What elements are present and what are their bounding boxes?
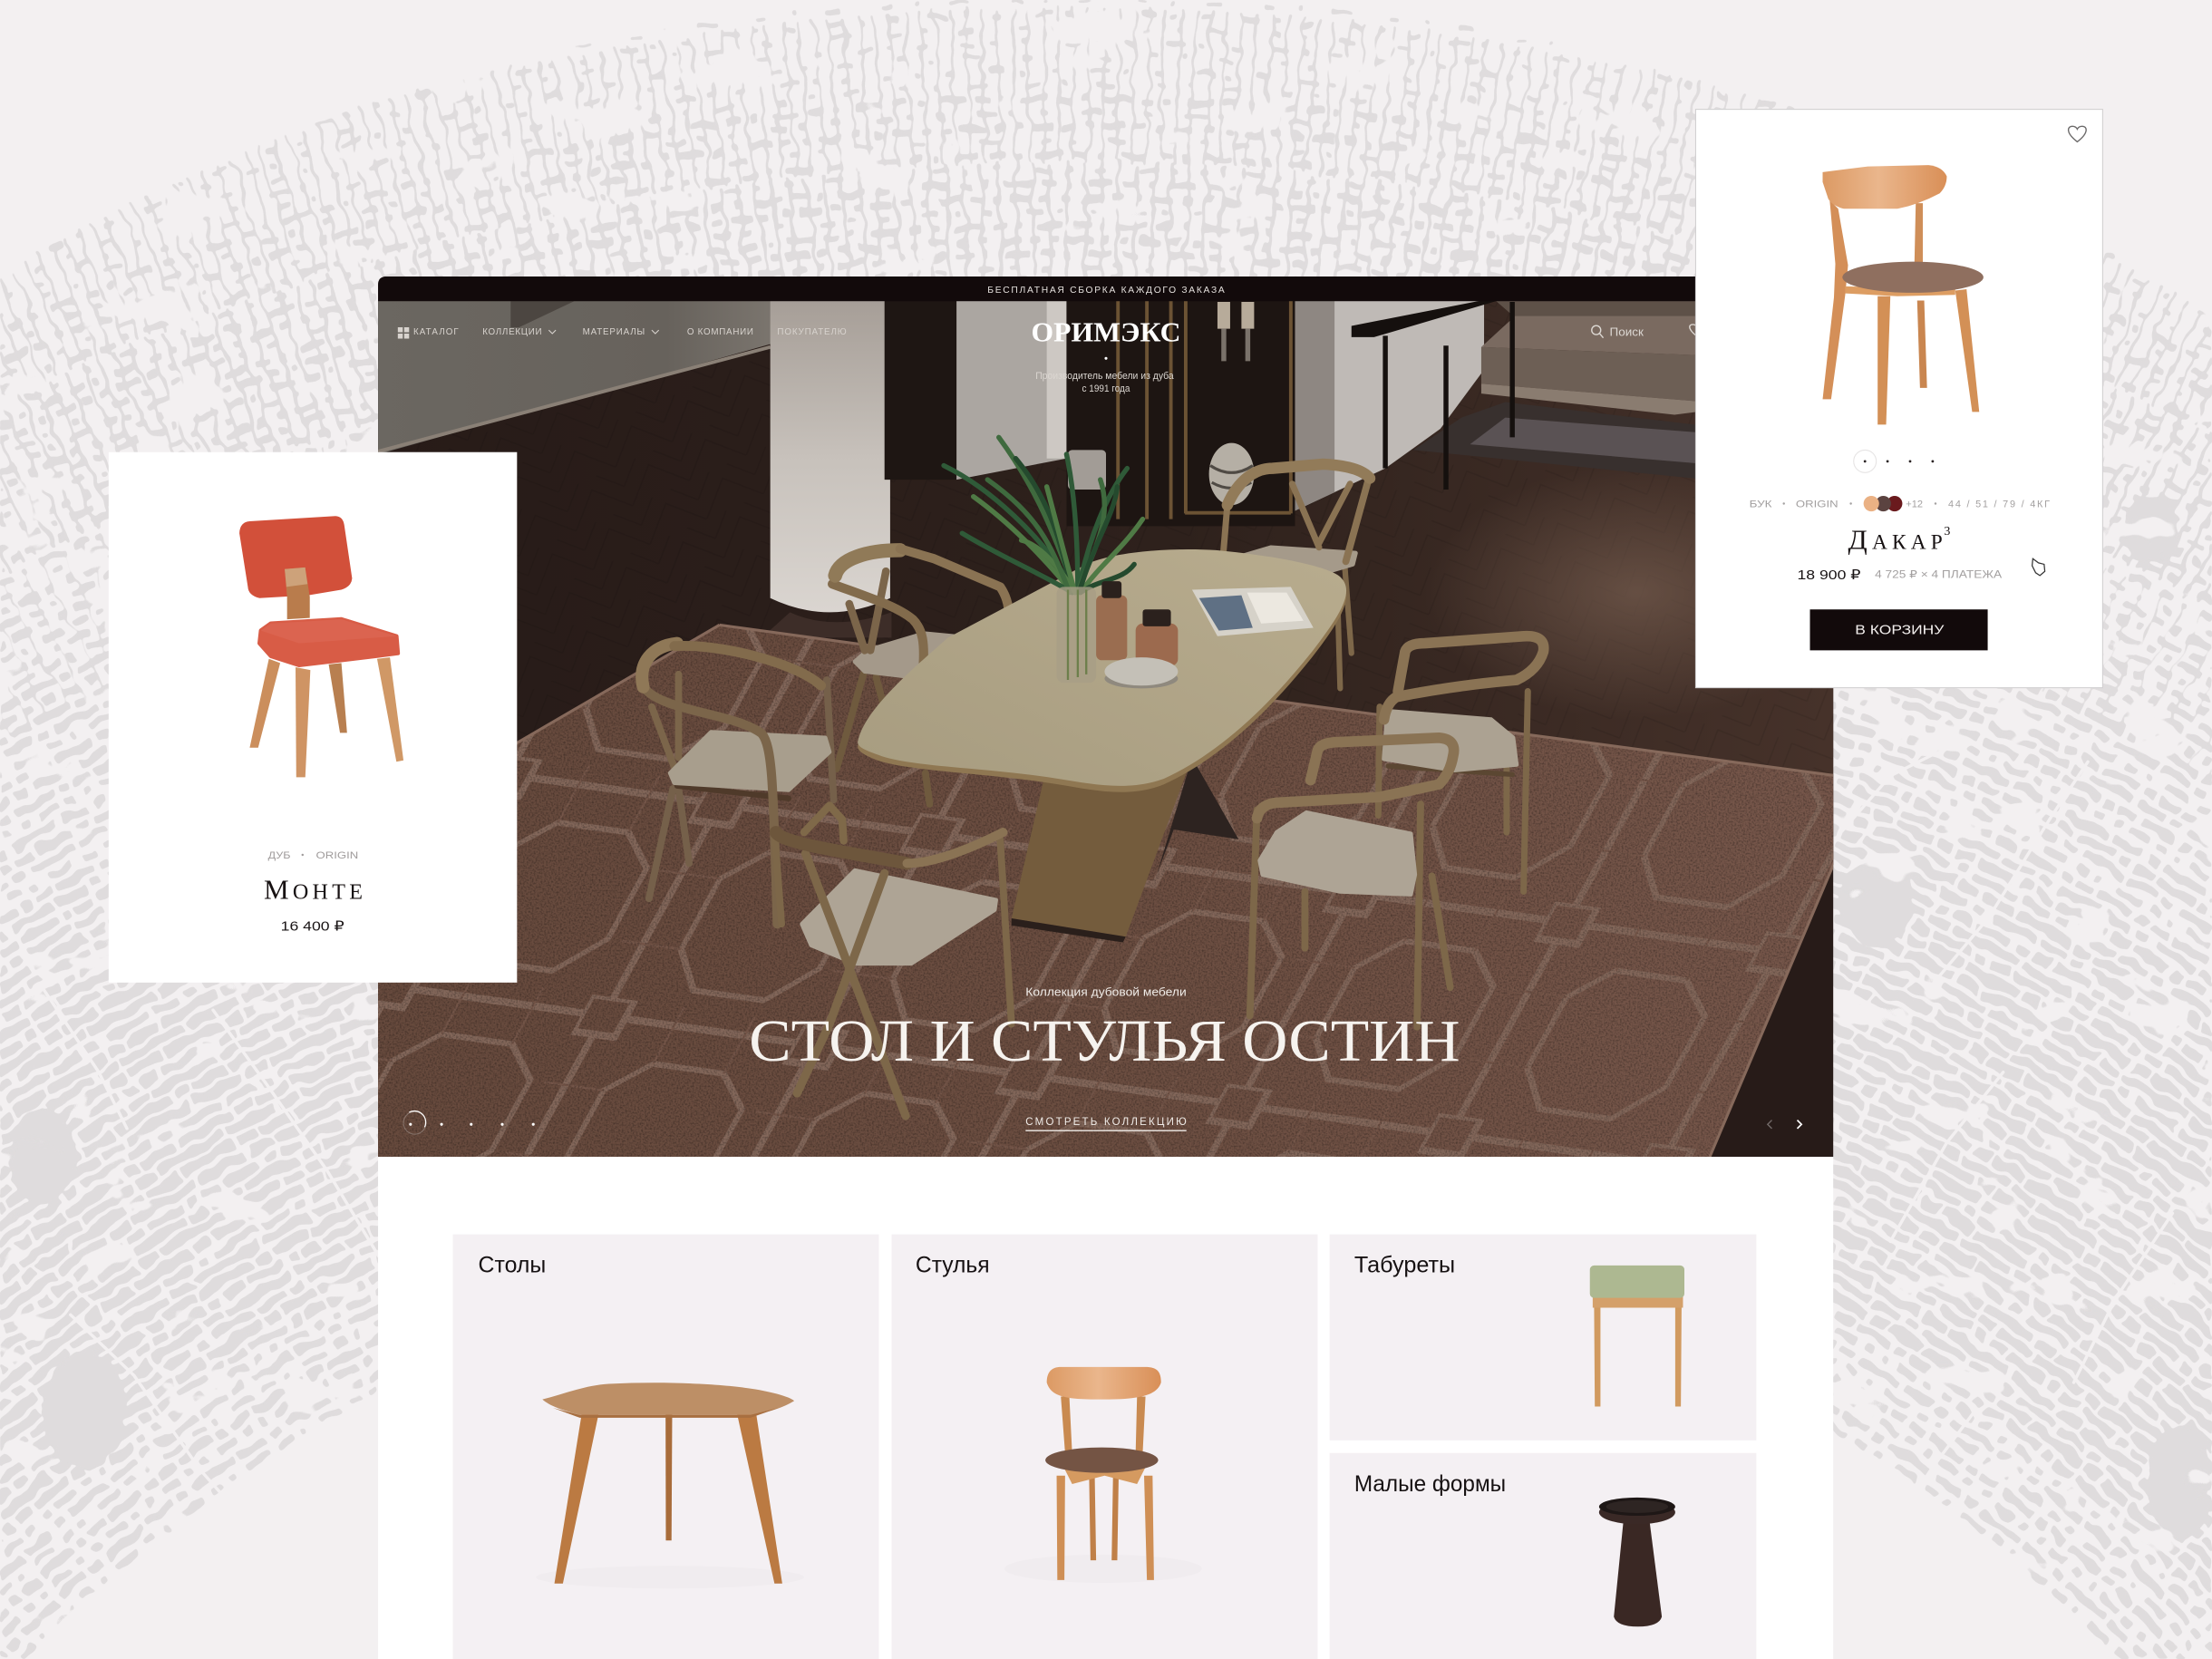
category card: chairs: Стулья (916, 1253, 990, 1278)
gallery dots (1854, 450, 1934, 472)
product photo: chair (1004, 1367, 1202, 1583)
product photo: side table (1599, 1498, 1675, 1626)
chair: right front (1250, 738, 1454, 1027)
chair: front with crossed legs (774, 806, 1012, 1116)
slider arrows (1768, 1121, 1801, 1129)
dining table (858, 549, 1346, 942)
table decor: plant, vases, plates and book (944, 437, 1314, 688)
add to cart button: В КОРЗИНУ (1855, 623, 1945, 637)
product card: Monte (109, 452, 517, 983)
product meta row with swatches: +12 (1906, 499, 1923, 509)
navigation menu: МАТЕРИАЛЫ (583, 327, 645, 337)
logo and tagline: с 1991 года (1082, 383, 1130, 394)
category card: stools: Табуреты (1354, 1253, 1455, 1278)
icon: hand cursor (2033, 558, 2045, 576)
product meta row with swatches: ORIGIN (1796, 499, 1838, 509)
category card: tables: Столы (479, 1253, 546, 1278)
navigation menu: КАТАЛОГ (413, 327, 459, 337)
category card: small forms: Малые формы (1354, 1471, 1506, 1497)
category card: chairs (891, 1235, 1317, 1659)
product meta: material and series: ORIGIN (316, 850, 358, 861)
chair: back right (1223, 464, 1370, 688)
navigation menu: КОЛЛЕКЦИИ (482, 327, 542, 337)
chair: right (1378, 636, 1544, 891)
hero photo: dining room (378, 276, 1869, 1157)
product card: Dakar: 18 900 ₽ (1797, 568, 1861, 583)
icon: catalog grid (398, 327, 409, 338)
slider dots (403, 1111, 535, 1134)
logo and tagline: ОРИМЭКС (1032, 316, 1180, 348)
hero headline block: СМОТРЕТЬ КОЛЛЕКЦИЮ (1025, 1117, 1187, 1128)
product photo: wooden chair (1823, 165, 1984, 424)
product card: Dakar (1695, 110, 2102, 688)
product meta row with swatches: БУК (1750, 499, 1772, 509)
logo and tagline (1032, 316, 1180, 394)
logo and tagline: Производитель мебели из дуба (1035, 371, 1174, 382)
navigation menu (398, 327, 847, 338)
chair: back left (832, 548, 1009, 804)
product meta row with swatches (1750, 496, 2050, 511)
add to cart button (1810, 609, 1988, 650)
hero headline block: Коллекция дубовой мебели (1025, 985, 1187, 999)
product card: Monte: М ОНТЕ (264, 873, 363, 905)
hero headline block (749, 985, 1460, 1131)
product photo: red chair (239, 516, 403, 777)
hero headline block: СТОЛ И СТУЛЬЯ ОСТИН (749, 1009, 1460, 1074)
product meta: material and series: ДУБ (268, 850, 291, 861)
chair: left (642, 644, 834, 924)
top announcement bar: БЕСПЛАТНАЯ СБОРКА КАЖДОГО ЗАКАЗА (987, 286, 1225, 296)
product meta: material and series (268, 850, 358, 861)
product photo: stool (1590, 1266, 1684, 1406)
search control (1592, 325, 1697, 338)
product card: Dakar: Д АКАР (1848, 523, 1943, 555)
browser mockup: hero section (378, 276, 1869, 1157)
search control: Поиск (1610, 325, 1644, 338)
white catalog section (378, 1157, 1833, 1659)
category card: small forms (1330, 1453, 1756, 1659)
texture cracks (43, 423, 2172, 1552)
product card: Dakar: 4 725 ₽ × 4 ПЛАТЕЖА (1875, 570, 2003, 581)
product card: Dakar: 3 (1944, 525, 1950, 538)
icon: favorite heart (2069, 126, 2086, 141)
navigation menu: ПОКУПАТЕЛЮ (777, 327, 847, 337)
navigation menu: О КОМПАНИИ (687, 327, 753, 337)
top announcement bar (378, 276, 1834, 301)
category card: stools (1330, 1235, 1756, 1441)
product card: Monte: 16 400 ₽ (281, 919, 344, 934)
product meta row with swatches: 44 / 51 / 79 / 4КГ (1948, 499, 2050, 509)
product photo: table (536, 1382, 804, 1588)
category card: tables (453, 1235, 878, 1659)
